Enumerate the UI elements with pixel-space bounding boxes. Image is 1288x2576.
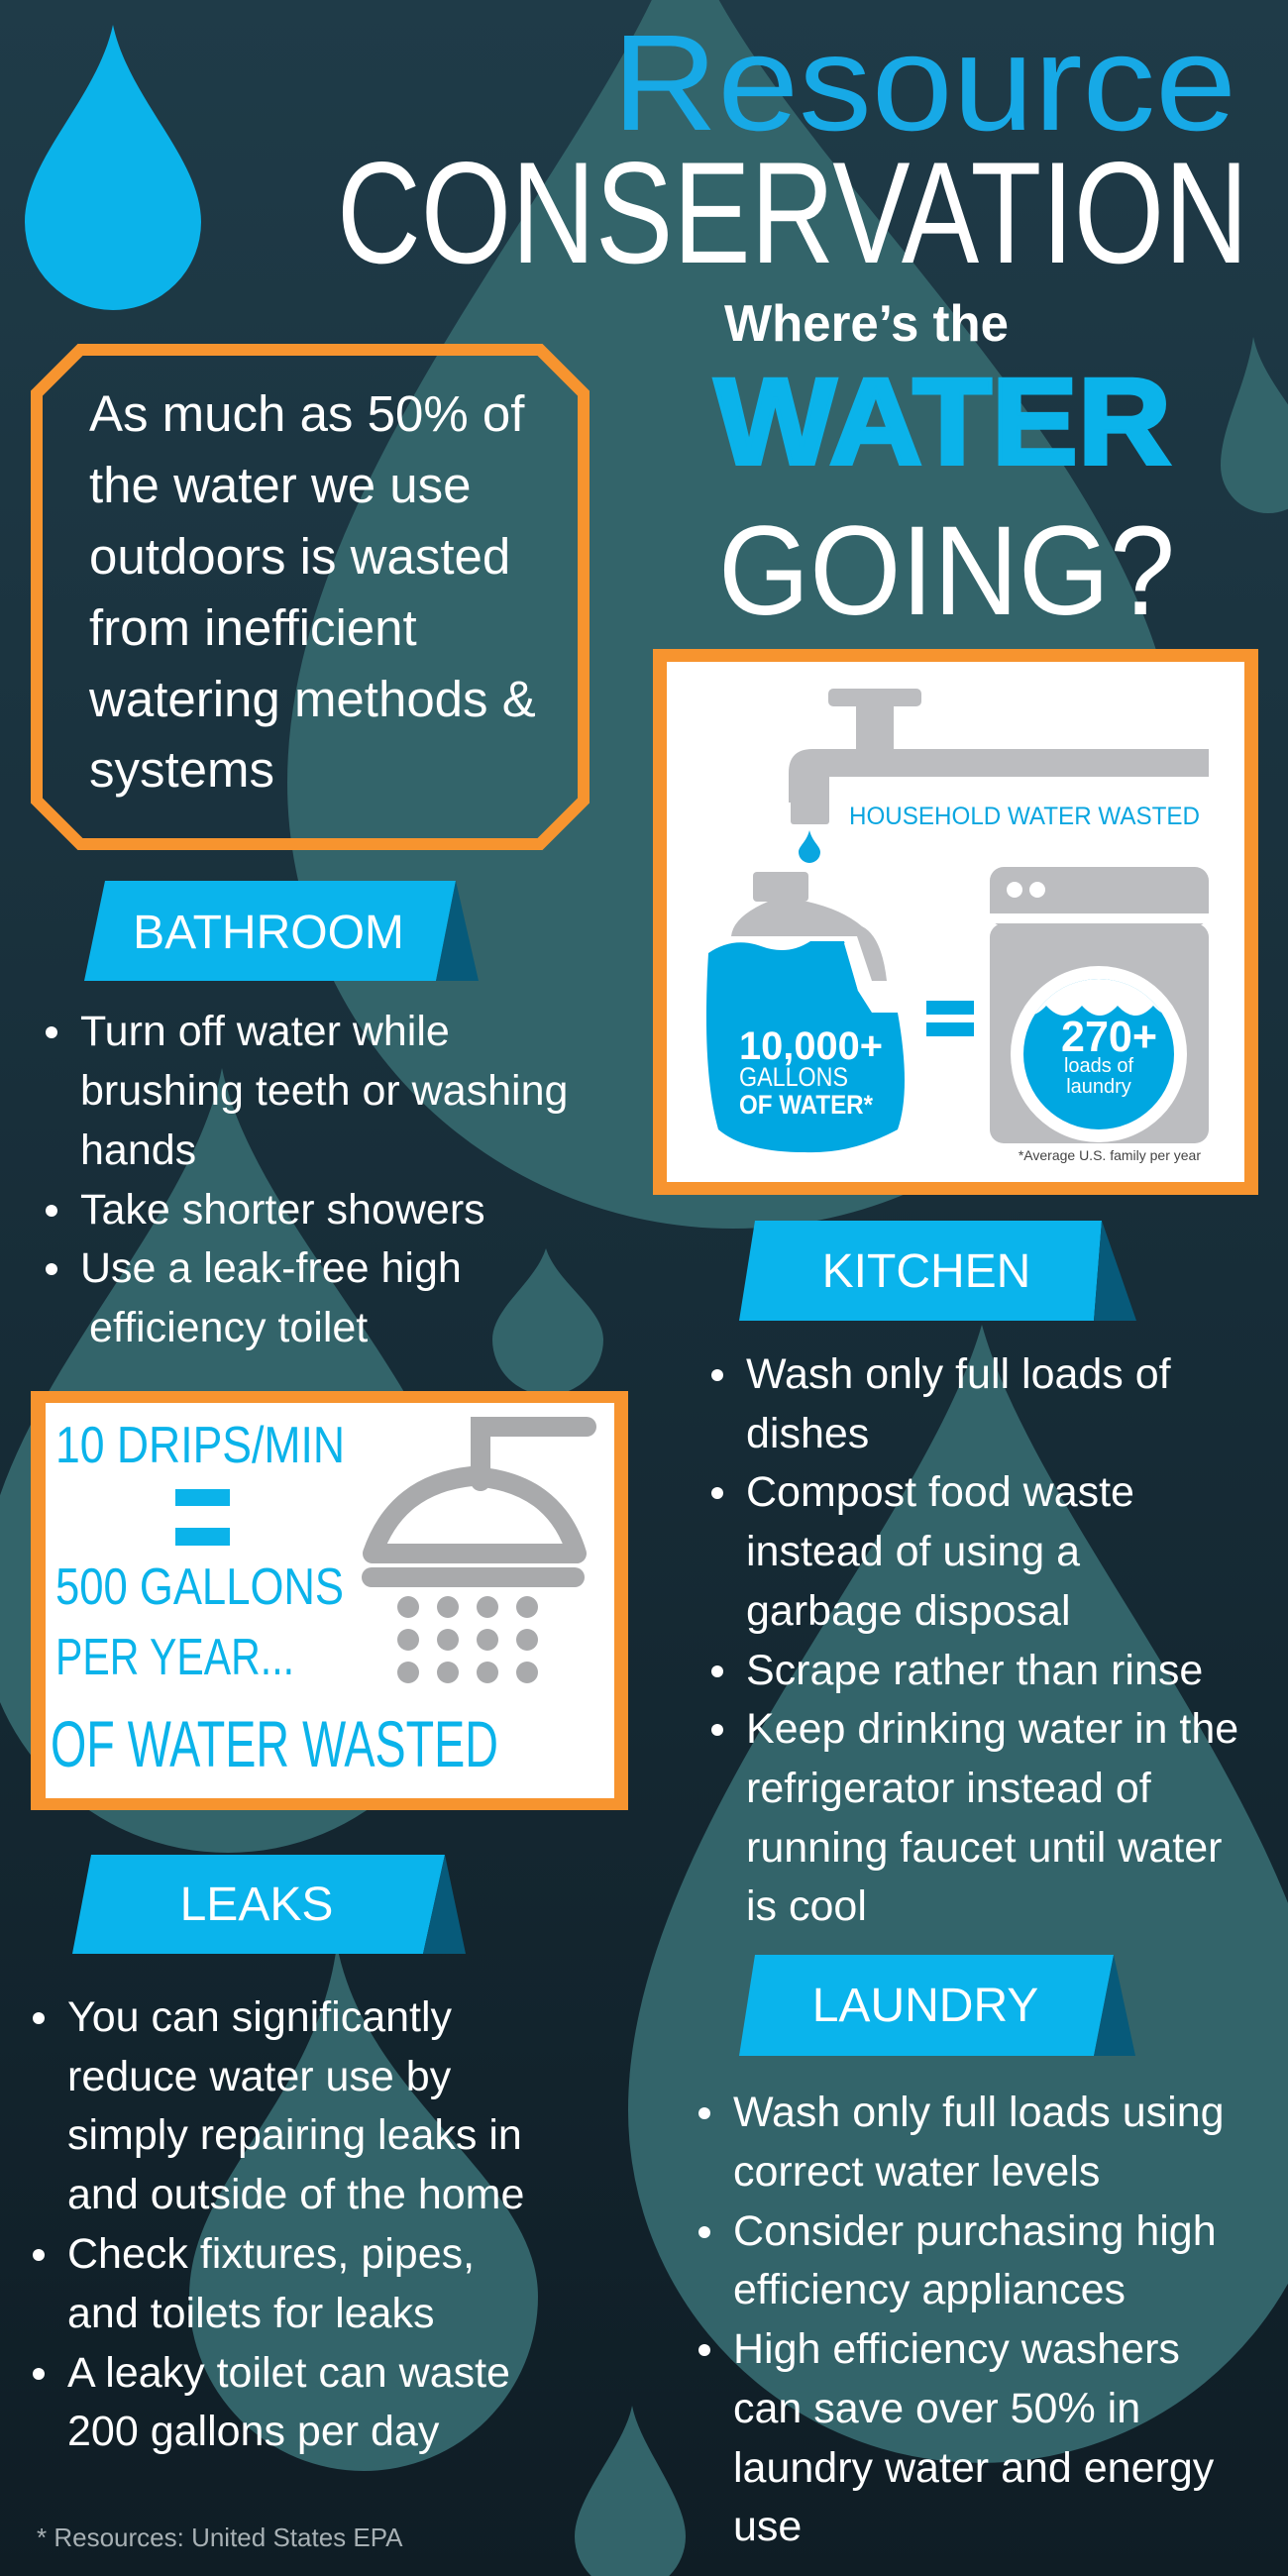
footer: sources: * Resources: United States EPA <box>37 2522 403 2552</box>
callout: 50% outdoor water wasted: the water we use <box>89 457 472 513</box>
list: bathroom tips: Use a leak-free high <box>80 1244 462 1292</box>
icon: water jug: GALLONS <box>739 1062 848 1092</box>
callout: 50% outdoor water wasted: from inefficient <box>89 599 417 656</box>
icon: washing machine: loads of <box>1064 1055 1133 1077</box>
list: kitchen tips: Compost food waste <box>746 1468 1134 1516</box>
list: kitchen tips: is cool <box>746 1882 867 1930</box>
list: kitchen tips: running faucet until water <box>746 1824 1222 1872</box>
subtitle: where's the water going: Where’s the <box>724 295 1009 353</box>
list: laundry tips: efficiency appliances <box>733 2266 1126 2313</box>
list: leaks tips: 200 gallons per day <box>67 2408 440 2455</box>
callout: 50% outdoor water wasted: As much as 50% of <box>89 385 525 442</box>
panel: household water wasted: HOUSEHOLD WATER WASTED <box>849 803 1200 830</box>
list: bathroom tips <box>46 1008 568 1351</box>
heading: laundry <box>739 1955 1135 2056</box>
heading: leaks <box>72 1855 466 1954</box>
list: leaks tips <box>33 1993 524 2455</box>
list: leaks tips: You can significantly <box>67 1993 453 2041</box>
panel: household water wasted: *Average U.S. family per year <box>1019 1147 1201 1163</box>
title: Resource <box>612 7 1236 160</box>
list: bathroom tips: Turn off water while <box>80 1008 450 1055</box>
list: bathroom tips: efficiency toilet <box>89 1304 368 1351</box>
list: kitchen tips: Scrape rather than rinse <box>746 1647 1203 1694</box>
list: kitchen tips: Keep drinking water in the <box>746 1705 1238 1753</box>
icon: shower head <box>372 1427 587 1683</box>
callout: 50% outdoor water wasted: outdoors is wasted <box>89 528 510 585</box>
title <box>337 7 1248 293</box>
subtitle: where's the water going: WATER <box>714 354 1171 490</box>
heading: bathroom <box>84 881 479 981</box>
icon: faucet <box>789 689 1209 824</box>
list: laundry tips <box>698 2089 1225 2550</box>
panel: drips per minute: 500 GALLONS <box>55 1558 344 1616</box>
panel: drips per minute: 10 DRIPS/MIN <box>55 1417 345 1474</box>
list: kitchen tips: garbage disposal <box>746 1587 1071 1635</box>
list: kitchen tips: Wash only full loads of <box>746 1350 1172 1398</box>
list: leaks tips: Check fixtures, pipes, <box>67 2230 475 2278</box>
list: leaks tips: A leaky toilet can waste <box>67 2349 510 2397</box>
list: leaks tips: and toilets for leaks <box>67 2290 434 2337</box>
icon: washing machine <box>990 867 1209 1143</box>
icon: washing machine: laundry <box>1066 1076 1131 1098</box>
list: laundry tips: Consider purchasing high <box>733 2207 1217 2255</box>
heading: kitchen <box>739 1221 1136 1321</box>
panel: household water wasted <box>653 649 1258 1195</box>
panel: drips per minute: OF WATER WASTED <box>51 1707 498 1780</box>
list: kitchen tips: dishes <box>746 1410 869 1457</box>
icon: washing machine: 270+ <box>1061 1013 1157 1061</box>
list: leaks tips: simply repairing leaks in <box>67 2111 522 2159</box>
callout: 50% outdoor water wasted <box>37 350 584 844</box>
subtitle: where's the water going: GOING? <box>718 500 1175 642</box>
icon: water jug: 10,000+ <box>739 1024 883 1068</box>
list: leaks tips: reduce water use by <box>67 2053 452 2100</box>
icon: water jug: OF WATER* <box>739 1090 873 1120</box>
heading: leaks: LEAKS <box>180 1878 333 1931</box>
list: laundry tips: can save over 50% in <box>733 2385 1140 2432</box>
list: leaks tips: and outside of the home <box>67 2171 524 2218</box>
list: bathroom tips: hands <box>80 1127 196 1174</box>
list: laundry tips: laundry water and energy <box>733 2444 1215 2492</box>
list: laundry tips: use <box>733 2503 802 2550</box>
callout: 50% outdoor water wasted: systems <box>89 741 274 798</box>
list: laundry tips: correct water levels <box>733 2148 1100 2196</box>
list: laundry tips: High efficiency washers <box>733 2325 1180 2373</box>
subtitle: where's the water going <box>714 295 1175 642</box>
callout: 50% outdoor water wasted: watering methods & <box>88 671 536 727</box>
icon: water jug <box>706 872 905 1152</box>
list: bathroom tips: brushing teeth or washing <box>80 1067 568 1115</box>
list: laundry tips: Wash only full loads using <box>733 2089 1225 2136</box>
icon: equals <box>926 1001 974 1036</box>
panel: drips per minute: PER YEAR... <box>55 1629 294 1686</box>
list: bathroom tips: Take shorter showers <box>80 1186 485 1234</box>
list: kitchen tips <box>711 1350 1238 1930</box>
heading: laundry: LAUNDRY <box>812 1980 1038 2032</box>
heading: kitchen: KITCHEN <box>822 1245 1030 1298</box>
panel: drips per minute <box>31 1391 628 1810</box>
list: kitchen tips: refrigerator instead of <box>746 1765 1152 1812</box>
icon: water drop <box>25 25 201 310</box>
heading: bathroom: BATHROOM <box>133 907 404 959</box>
list: kitchen tips: instead of using a <box>746 1528 1080 1575</box>
